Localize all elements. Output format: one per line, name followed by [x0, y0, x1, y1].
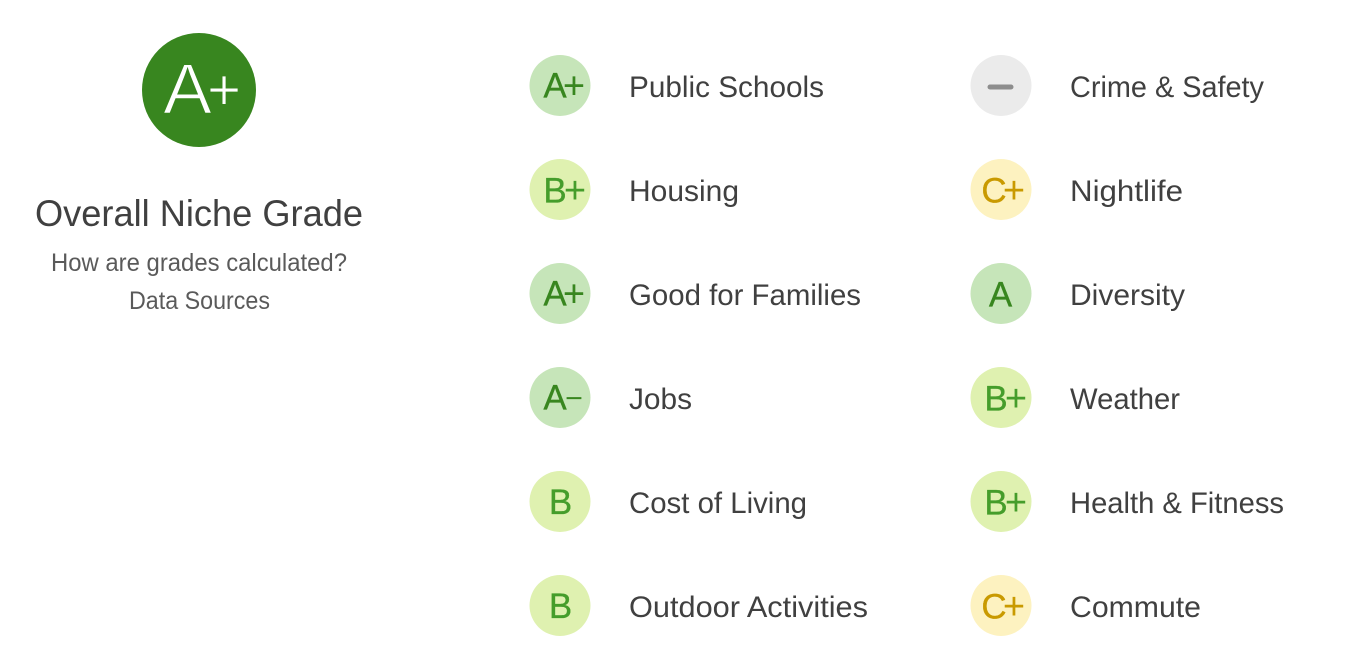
row: Housing B+: + [564, 170, 586, 212]
link: data sources: Data Sources [129, 287, 270, 315]
row: Health & Fitness B+: B [984, 484, 1008, 522]
row: Good for Families A+ [530, 263, 861, 324]
row: Commute C+: C [981, 588, 1007, 626]
row: Outdoor Activities B: Outdoor Activities [629, 591, 868, 624]
row: Nightlife C+ [970, 159, 1183, 220]
row: Cost of Living B: Cost of Living [629, 487, 807, 520]
row: Public Schools A+: + [563, 66, 585, 108]
row: Housing B+ [530, 159, 739, 220]
row: Public Schools A+: A [543, 66, 567, 106]
panel: grades column two [970, 55, 1284, 636]
row: Commute C+: Commute [1070, 591, 1201, 624]
row: Nightlife C+: Nightlife [1070, 175, 1183, 208]
overall grade badge: A+: A [163, 50, 213, 130]
row: Crime & Safety no grade [970, 55, 1264, 116]
row: Housing B+: Housing [629, 175, 739, 208]
row: Nightlife C+: + [1003, 170, 1025, 212]
row: Jobs A- [530, 367, 692, 428]
panel: grades column one [530, 55, 868, 636]
row: Health & Fitness B+: Health & Fitness [1070, 487, 1284, 520]
row: Commute C+ [970, 575, 1201, 636]
row: Outdoor Activities B [530, 575, 868, 636]
row: Health & Fitness B+: + [1005, 482, 1027, 524]
row: Housing B+: B [543, 172, 567, 210]
row: Jobs A-: A [543, 378, 567, 418]
row: Crime & Safety no grade: Crime & Safety [1070, 71, 1264, 104]
overall grade badge: A+ [142, 33, 256, 147]
row: Good for Families A+: A [543, 274, 567, 314]
row: Diversity A: A [989, 276, 1013, 314]
row: Good for Families A+: Good for Families [629, 279, 861, 312]
row: Jobs A-: Jobs [629, 383, 692, 416]
row: Good for Families A+: + [563, 274, 585, 316]
row: Weather B+: + [1005, 378, 1027, 420]
row: Public Schools A+ [530, 55, 824, 116]
row: Weather B+: Weather [1070, 383, 1180, 416]
link: how are grades calculated: How are grades calculated? [51, 249, 347, 277]
row: Diversity A: Diversity [1070, 279, 1185, 312]
row: Weather B+ [970, 367, 1180, 428]
row: Jobs A-: – [567, 380, 582, 410]
row: Weather B+: B [984, 380, 1008, 418]
row: Cost of Living B: B [549, 483, 572, 522]
row: Nightlife C+: C [981, 172, 1007, 210]
overall grade badge: A+: + [207, 58, 241, 122]
row: Commute C+: + [1003, 586, 1025, 628]
panel: overall grade [35, 33, 363, 315]
row: Cost of Living B [530, 471, 807, 532]
row: Outdoor Activities B: B [549, 587, 572, 626]
heading: Overall Niche Grade: Overall Niche Grade [35, 193, 363, 234]
row: Diversity A [970, 263, 1185, 324]
row: Health & Fitness B+ [970, 471, 1284, 532]
row: Public Schools A+: Public Schools [629, 71, 824, 104]
